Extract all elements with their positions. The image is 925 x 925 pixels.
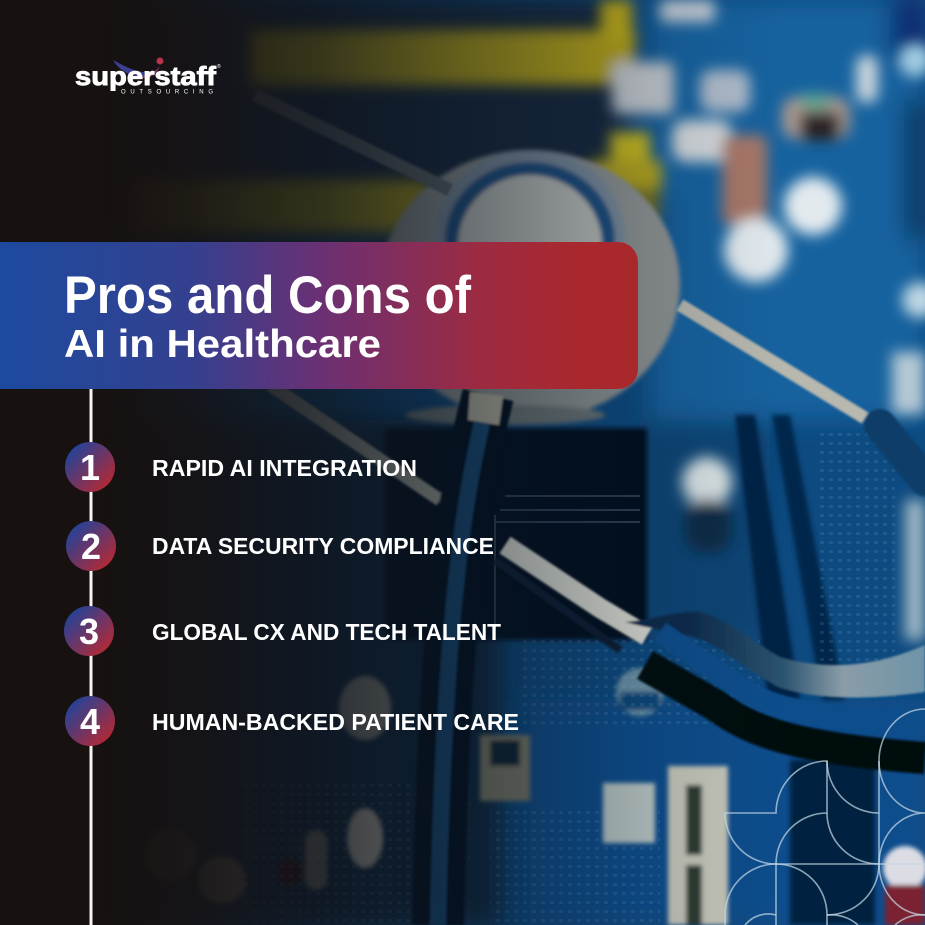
item 3 bbox=[64, 606, 501, 656]
label 3: GLOBAL CX AND TECH TALENT bbox=[152, 619, 501, 645]
badge 3 bbox=[64, 606, 114, 656]
stethoscope chest piece bbox=[380, 150, 680, 425]
logo: superstaff outsourcing bbox=[75, 58, 221, 96]
title banner bbox=[0, 242, 638, 389]
label 2: DATA SECURITY COMPLIANCE bbox=[152, 533, 494, 559]
decorative outline shapes, bottom right bbox=[725, 709, 925, 925]
heat sink fins bbox=[495, 496, 640, 630]
logo subtitle: OUTSOURCING bbox=[121, 90, 213, 96]
badge 1: 1 bbox=[80, 447, 100, 488]
label 1: RAPID AI INTEGRATION bbox=[152, 455, 417, 481]
title line 1: Pros and Cons of bbox=[64, 266, 471, 325]
item 2 bbox=[66, 521, 494, 571]
badge 1 bbox=[65, 442, 115, 492]
label 4: HUMAN-BACKED PATIENT CARE bbox=[152, 709, 519, 735]
yellow slots and blurred components bbox=[130, 0, 925, 640]
PCB components pattern bbox=[520, 640, 760, 730]
title line 2: AI in Healthcare bbox=[64, 323, 381, 366]
item 1 bbox=[65, 442, 417, 492]
badge 2 bbox=[66, 521, 116, 571]
badge 4: 4 bbox=[80, 701, 100, 742]
stethoscope silver band bbox=[625, 612, 925, 698]
logo swoosh bbox=[113, 58, 164, 78]
logo wordmark: superstaff bbox=[75, 61, 216, 91]
metal rods and tubes bbox=[255, 95, 925, 925]
badge 4 bbox=[65, 696, 115, 746]
board slots and heat sink bbox=[144, 415, 925, 925]
registered mark: ® bbox=[217, 63, 221, 70]
item 4 bbox=[65, 696, 519, 746]
badge 2: 2 bbox=[81, 526, 101, 567]
timeline vertical line bbox=[90, 388, 92, 925]
badge 3: 3 bbox=[79, 611, 99, 652]
